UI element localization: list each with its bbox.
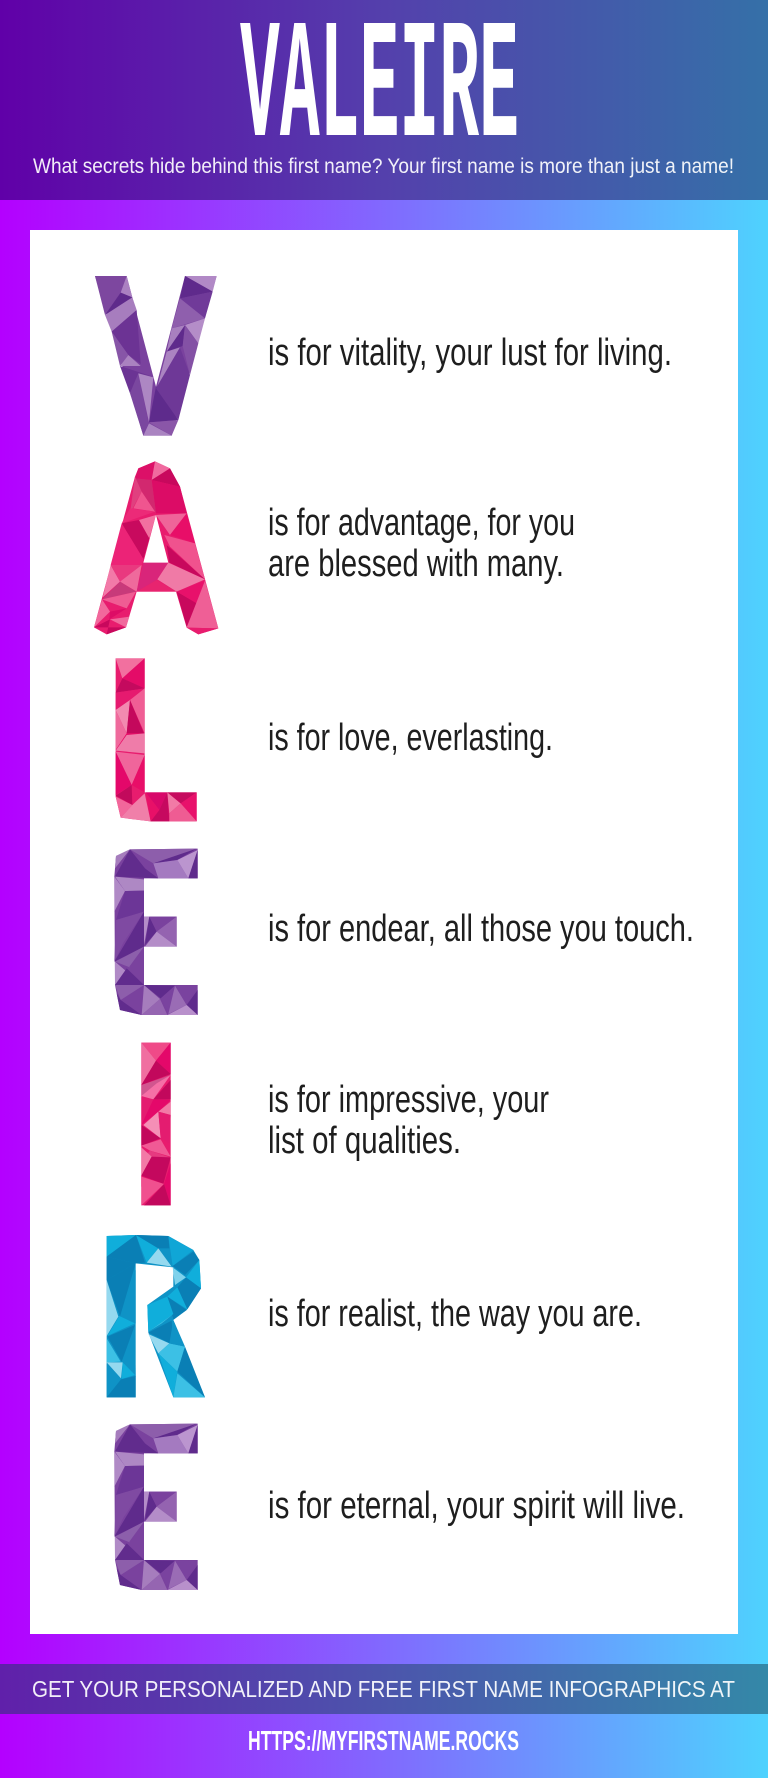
text: I row: list of qualities. — [268, 1120, 461, 1162]
text: R row: is for realist, the way you are. — [268, 1293, 642, 1335]
text: L row: is for love, everlasting. — [268, 717, 553, 759]
footer url: HTTPS://MYFIRSTNAME.ROCKS — [248, 1725, 519, 1756]
text: A row — [268, 502, 575, 585]
letter E — [114, 849, 198, 1015]
letter L — [116, 658, 197, 821]
header banner — [0, 0, 768, 200]
footer band — [0, 1664, 768, 1714]
text: I row: is for impressive, your — [268, 1079, 549, 1121]
letter A — [94, 461, 218, 634]
A counter — [143, 515, 168, 563]
letter R — [107, 1235, 205, 1397]
letter V — [95, 276, 217, 436]
text: A row: is for advantage, for you — [268, 502, 575, 544]
text: I row — [268, 1079, 549, 1162]
letter E (last) — [114, 1424, 198, 1590]
white content panel — [30, 230, 738, 1634]
text: A row: are blessed with many. — [268, 543, 564, 585]
letter I — [141, 1043, 171, 1205]
